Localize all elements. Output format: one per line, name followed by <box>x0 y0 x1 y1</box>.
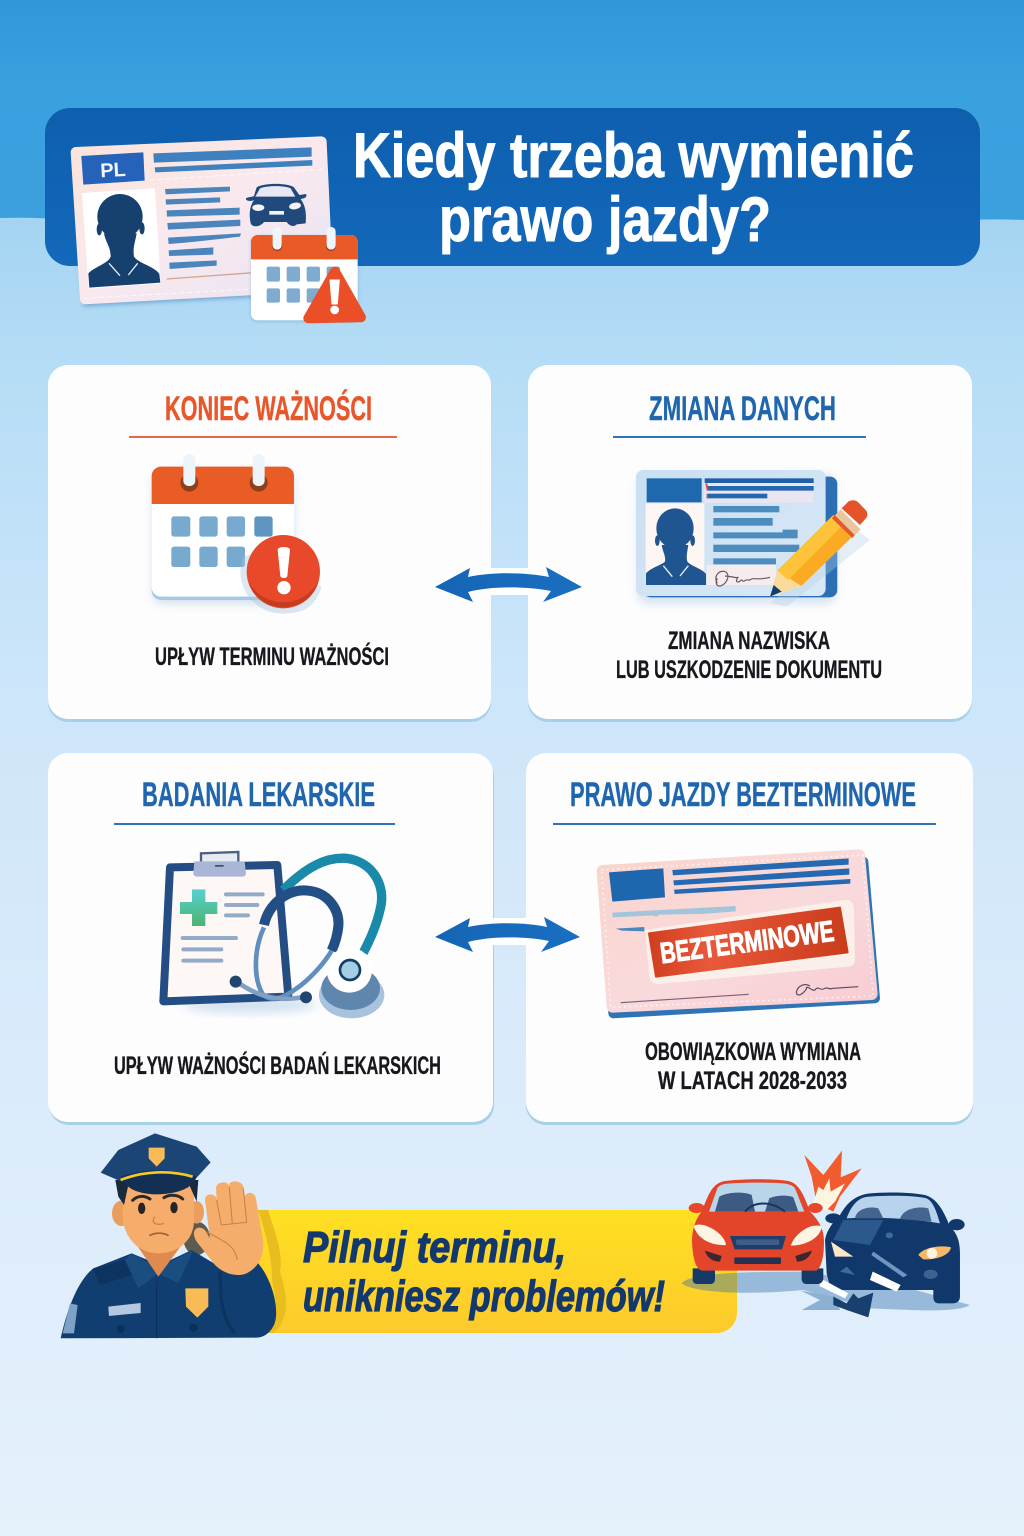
callout text <box>303 1223 665 1321</box>
dark car <box>819 1193 965 1303</box>
head <box>112 1201 131 1226</box>
pencil <box>770 530 870 607</box>
chest piece <box>319 947 384 1018</box>
icon: car crash <box>682 1151 970 1317</box>
text: obowiązkowa wymiana <box>645 1038 861 1095</box>
panel: zmiana danych <box>528 365 972 722</box>
icon: car on licence <box>246 184 306 226</box>
heading: koniec ważności: KONIEC WAŻNOŚCI <box>165 390 372 428</box>
icon: driving licence with calendar warning <box>73 142 361 320</box>
text: zmiana nazwiska: LUB USZKODZENIE DOKUMENTU <box>616 656 882 684</box>
signature <box>716 571 770 586</box>
hand <box>194 1181 263 1275</box>
cap <box>101 1133 211 1181</box>
silhouette <box>88 194 160 288</box>
icon: calendar <box>251 235 358 320</box>
debris <box>801 1291 873 1317</box>
callout text: unikniesz problemów! <box>303 1272 665 1321</box>
red car <box>689 1179 824 1284</box>
callout: yellow reminder banner <box>250 1210 737 1333</box>
icon: driving licence with calendar warning: PL <box>100 159 126 182</box>
text: zmiana nazwiska <box>616 627 882 684</box>
panel: badania lekarskie <box>48 753 494 1125</box>
title text: Kiedy trzeba wymienić <box>353 121 914 191</box>
arrow: bottom double arrow <box>435 917 580 952</box>
text: upływ ważności: UPŁYW WAŻNOŚCI BADAŃ LEKARSKICH <box>114 1050 441 1080</box>
panel: koniec ważności <box>48 365 491 722</box>
icon: alert badge <box>240 535 322 614</box>
text: zmiana nazwiska: ZMIANA NAZWISKA <box>668 627 830 655</box>
icon: permanent licence: BEZTERMINOWE <box>658 915 836 970</box>
text: upływ terminu: UPŁYW TERMINU WAŻNOŚCI <box>155 641 389 671</box>
arrow: top double arrow <box>435 567 582 602</box>
panel: prawo jazdy bezterminowe <box>526 753 973 1125</box>
icon: licence with pencil <box>636 470 870 607</box>
title banner <box>45 108 980 266</box>
heading: badania lekarskie: BADANIA LEKARSKIE <box>142 776 375 814</box>
silhouette <box>646 508 706 585</box>
shadow under cars <box>682 1272 970 1310</box>
top blue sky band <box>0 0 1024 250</box>
text: obowiązkowa wymiana: W LATACH 2028-2033 <box>658 1067 847 1095</box>
icon: police officer <box>61 1133 276 1338</box>
icon: calendar with alert <box>152 454 322 614</box>
heading: zmiana danych: ZMIANA DANYCH <box>649 390 836 428</box>
text: obowiązkowa wymiana: OBOWIĄZKOWA WYMIANA <box>645 1038 861 1066</box>
icon: permanent licence <box>602 855 875 1013</box>
callout text: Pilnuj terminu, <box>303 1223 566 1272</box>
title text: prawo jazdy? <box>439 185 771 255</box>
icon: warning triangle <box>308 272 361 318</box>
body <box>61 1250 276 1338</box>
title text <box>353 121 914 255</box>
icon: clipboard and stethoscope <box>163 852 384 1018</box>
explosion <box>804 1151 862 1212</box>
